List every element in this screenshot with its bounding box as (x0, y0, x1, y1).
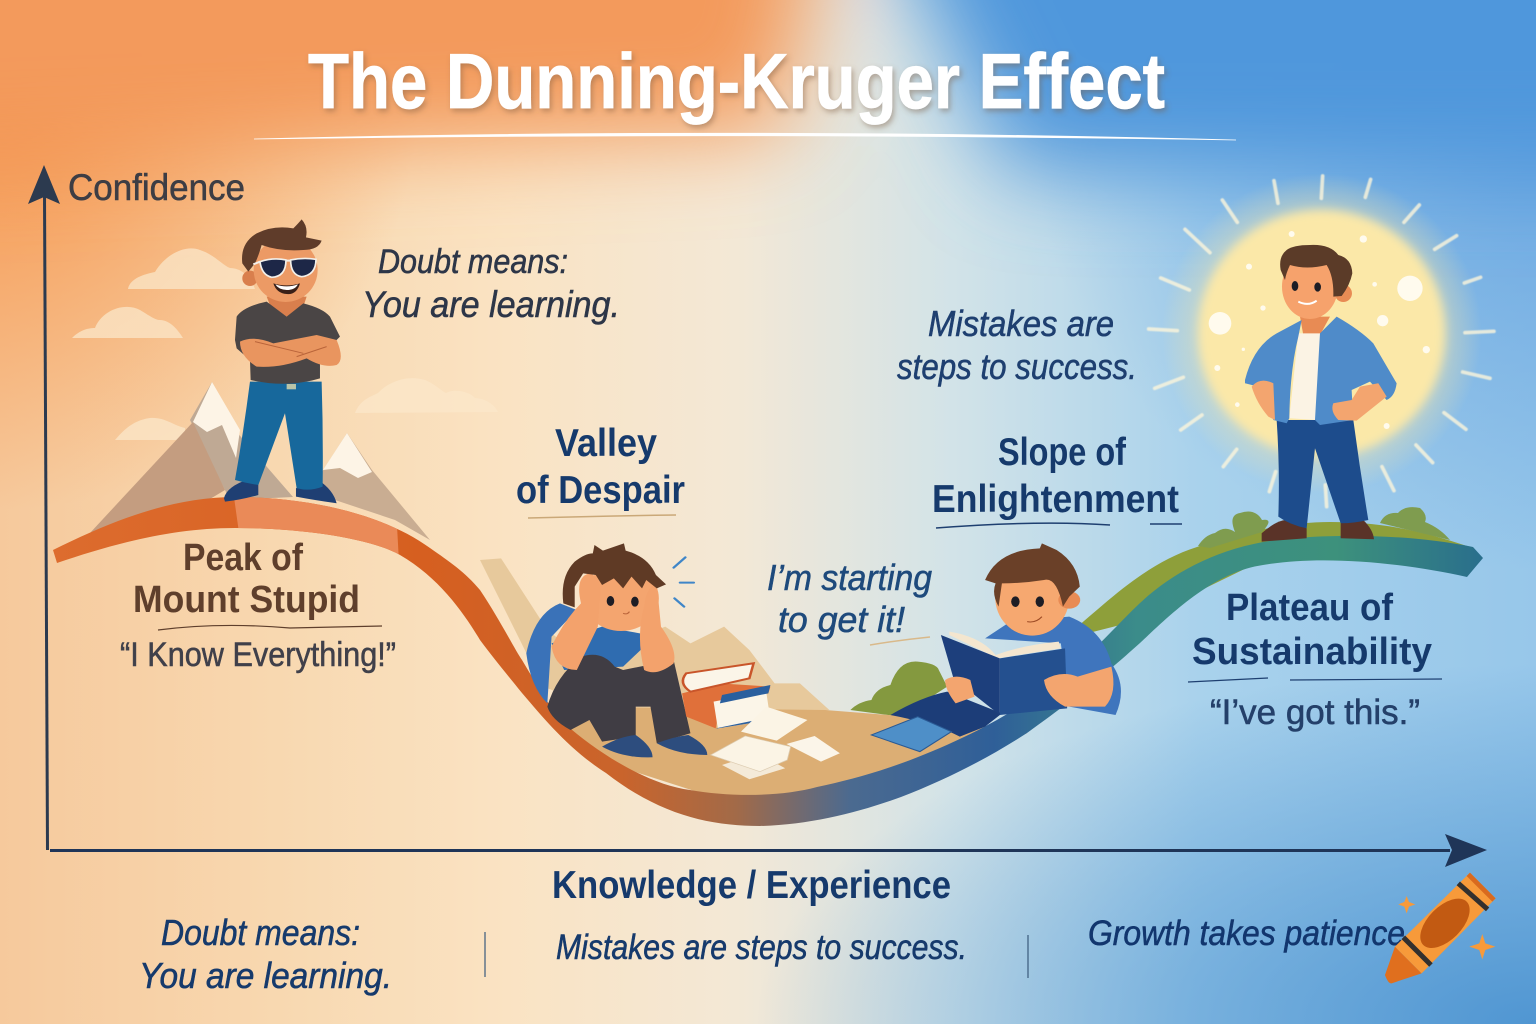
mountains (90, 382, 430, 540)
quote: doubt means top: You are learning. (362, 284, 620, 325)
y axis (28, 165, 60, 850)
clouds (72, 248, 498, 440)
curve: olive upper strip on the right (1061, 522, 1470, 640)
bushes on plateau (1198, 507, 1450, 548)
footer: mistakes: Mistakes are steps to success. (556, 928, 967, 967)
figure: confident man on plateau (1245, 245, 1397, 542)
footer: growth: Growth takes patience (1088, 914, 1405, 953)
figure: despairing man in valley (526, 543, 840, 779)
label: valley of despair: of Despair (516, 469, 685, 512)
label: valley of despair: Valley (555, 422, 657, 465)
axis label: knowledge: Knowledge / Experience (552, 864, 951, 907)
icon: crayon with sparkles (1385, 873, 1496, 983)
figure: peak confident man with sunglasses (224, 219, 341, 503)
label: peak of mount stupid: “I Know Everything!” (120, 636, 396, 674)
figure: reading man on slope (871, 543, 1121, 752)
footer: doubt means: Doubt means: (161, 912, 360, 953)
books and scattered papers (682, 663, 840, 779)
label: slope of enlightenment: Slope of (998, 431, 1127, 474)
quote: doubt means top (362, 243, 620, 325)
quote: doubt means top: Doubt means: (378, 243, 568, 281)
label: plateau of sustainability (1188, 587, 1442, 732)
label: slope of enlightenment (932, 431, 1182, 528)
label: valley of despair (516, 422, 685, 518)
label: peak of mount stupid: Peak of (183, 537, 303, 579)
main confidence curve (53, 497, 1483, 826)
top background washes (0, 0, 1536, 170)
quote: starting to get it (767, 557, 932, 645)
quote: mistakes are steps: steps to success. (897, 346, 1137, 387)
label: plateau of sustainability: Sustainability (1192, 631, 1432, 673)
quote: mistakes are steps (897, 303, 1137, 387)
quote: starting to get it: I’m starting (767, 557, 932, 598)
title: The Dunning-Kruger Effect (308, 37, 1165, 125)
valley hills and floor (480, 558, 1027, 803)
label: peak of mount stupid: Mount Stupid (133, 579, 360, 621)
footer: doubt means (139, 912, 392, 996)
x axis (50, 834, 1487, 867)
label: plateau of sustainability: “I’ve got this.” (1210, 693, 1420, 732)
icon: sun glow behind confident figure (1149, 173, 1494, 507)
label: slope of enlightenment: Enlightenment (932, 478, 1179, 521)
footer: doubt means: You are learning. (139, 955, 392, 996)
quote: starting to get it: to get it! (778, 599, 905, 640)
label: peak of mount stupid (120, 537, 396, 674)
quote: mistakes are steps: Mistakes are (928, 303, 1114, 344)
label: plateau of sustainability: Plateau of (1226, 587, 1393, 629)
axis label: confidence: Confidence (68, 167, 245, 208)
